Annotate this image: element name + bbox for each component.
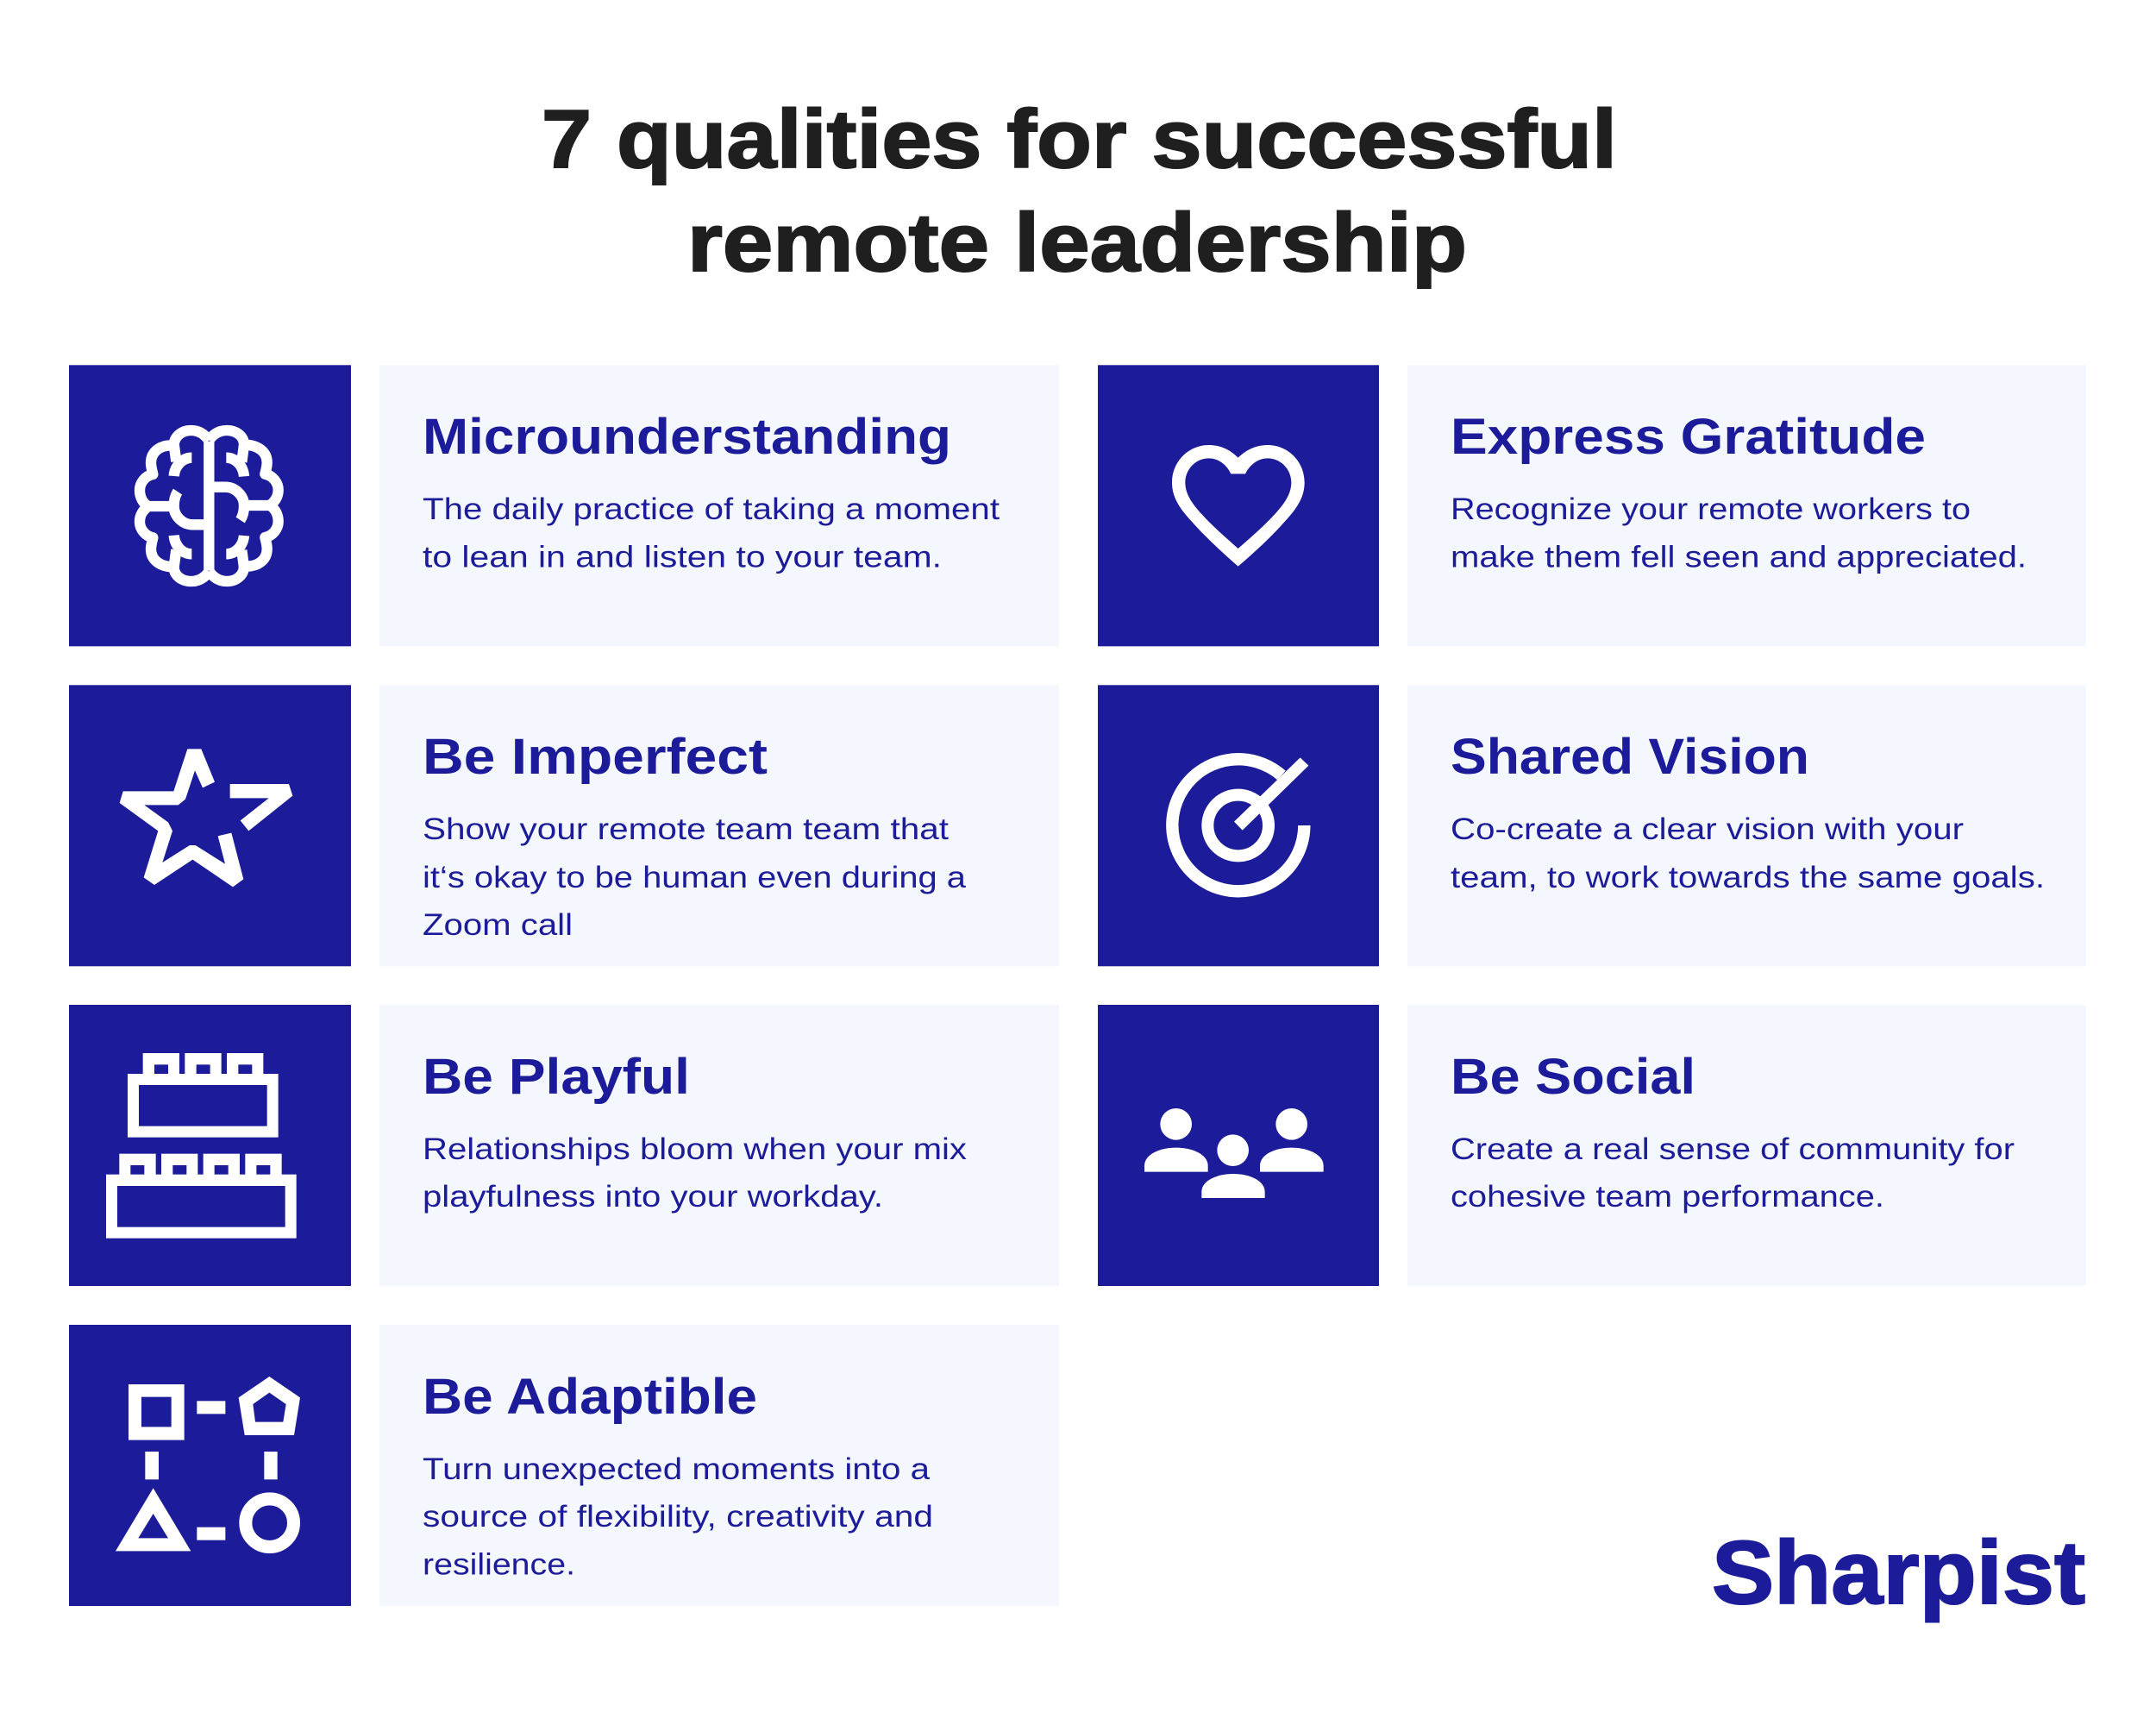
icon box: heart	[1098, 365, 1379, 646]
panel: Microunderstanding text: The daily practice of taking a moment	[423, 492, 1000, 526]
panel: Be Playful text: Relationships bloom when your mix	[423, 1132, 968, 1166]
panel: Microunderstanding text: to lean in and listen to your team.	[423, 540, 942, 574]
icon box: connected shapes	[69, 1325, 351, 1606]
panel: Be Imperfect text: Be Imperfect	[423, 729, 768, 785]
panel: Shared Vision text: Co-create a clear vision with your	[1451, 812, 1964, 846]
card: Shared Vision	[1098, 685, 2086, 966]
panel: Be Adaptible text: resilience.	[423, 1547, 575, 1582]
panel: Be Adaptible text: Turn unexpected moments into a	[423, 1452, 931, 1486]
title: 7 qualities for successful	[542, 93, 1617, 185]
panel: Be Playful text	[379, 1005, 1059, 1286]
panel: Be Adaptible text	[379, 1325, 1059, 1606]
title: remote leadership	[687, 197, 1467, 289]
panel: Shared Vision text: team, to work towards the same goals.	[1451, 861, 2045, 894]
logo: Sharpist: Sharpist	[1712, 1523, 2085, 1623]
panel: Express Gratitude text: Recognize your remote workers to	[1451, 492, 1971, 526]
panel: Be Social text: Create a real sense of community for	[1451, 1132, 2015, 1166]
panel: Express Gratitude text: make them fell seen and appreciated.	[1451, 540, 2027, 574]
card: Be Social	[1098, 1005, 2086, 1286]
panel: Express Gratitude text: Express Gratitude	[1451, 409, 1926, 465]
panel: Shared Vision text	[1407, 685, 2086, 966]
panel: Be Playful text: playfulness into your workday.	[423, 1180, 883, 1214]
panel: Be Imperfect text: Show your remote team team that	[423, 812, 949, 846]
panel: Microunderstanding text: Microunderstanding	[423, 409, 951, 465]
panel: Be Imperfect text: it‘s okay to be human even during a	[423, 861, 967, 894]
panel: Express Gratitude text	[1407, 365, 2086, 646]
panel: Be Adaptible text: Be Adaptible	[423, 1369, 757, 1425]
panel: Shared Vision text: Shared Vision	[1451, 729, 1809, 785]
panel: Be Imperfect text: Zoom call	[423, 908, 573, 942]
icon box: building blocks	[69, 1005, 351, 1286]
card: Express Gratitude	[1098, 365, 2086, 646]
panel: Be Social text: cohesive team performance.	[1451, 1180, 1884, 1214]
panel: Be Adaptible text: source of flexibility, creativity and	[423, 1500, 933, 1534]
card: Be Imperfect	[69, 685, 1059, 966]
icon box: people	[1098, 1005, 1379, 1286]
icon box: broken star	[69, 685, 351, 966]
card: Be Playful	[69, 1005, 1059, 1286]
title	[542, 93, 1617, 289]
icon box: target	[1098, 685, 1379, 966]
panel: Be Imperfect text	[379, 685, 1059, 966]
card: Microunderstanding	[69, 365, 1059, 646]
card: Be Adaptible	[69, 1325, 1059, 1606]
panel: Be Social text	[1407, 1005, 2086, 1286]
panel: Be Social text: Be Social	[1451, 1049, 1695, 1105]
icon box: brain	[69, 365, 351, 646]
panel: Microunderstanding text	[379, 365, 1059, 646]
panel: Be Playful text: Be Playful	[423, 1049, 690, 1105]
